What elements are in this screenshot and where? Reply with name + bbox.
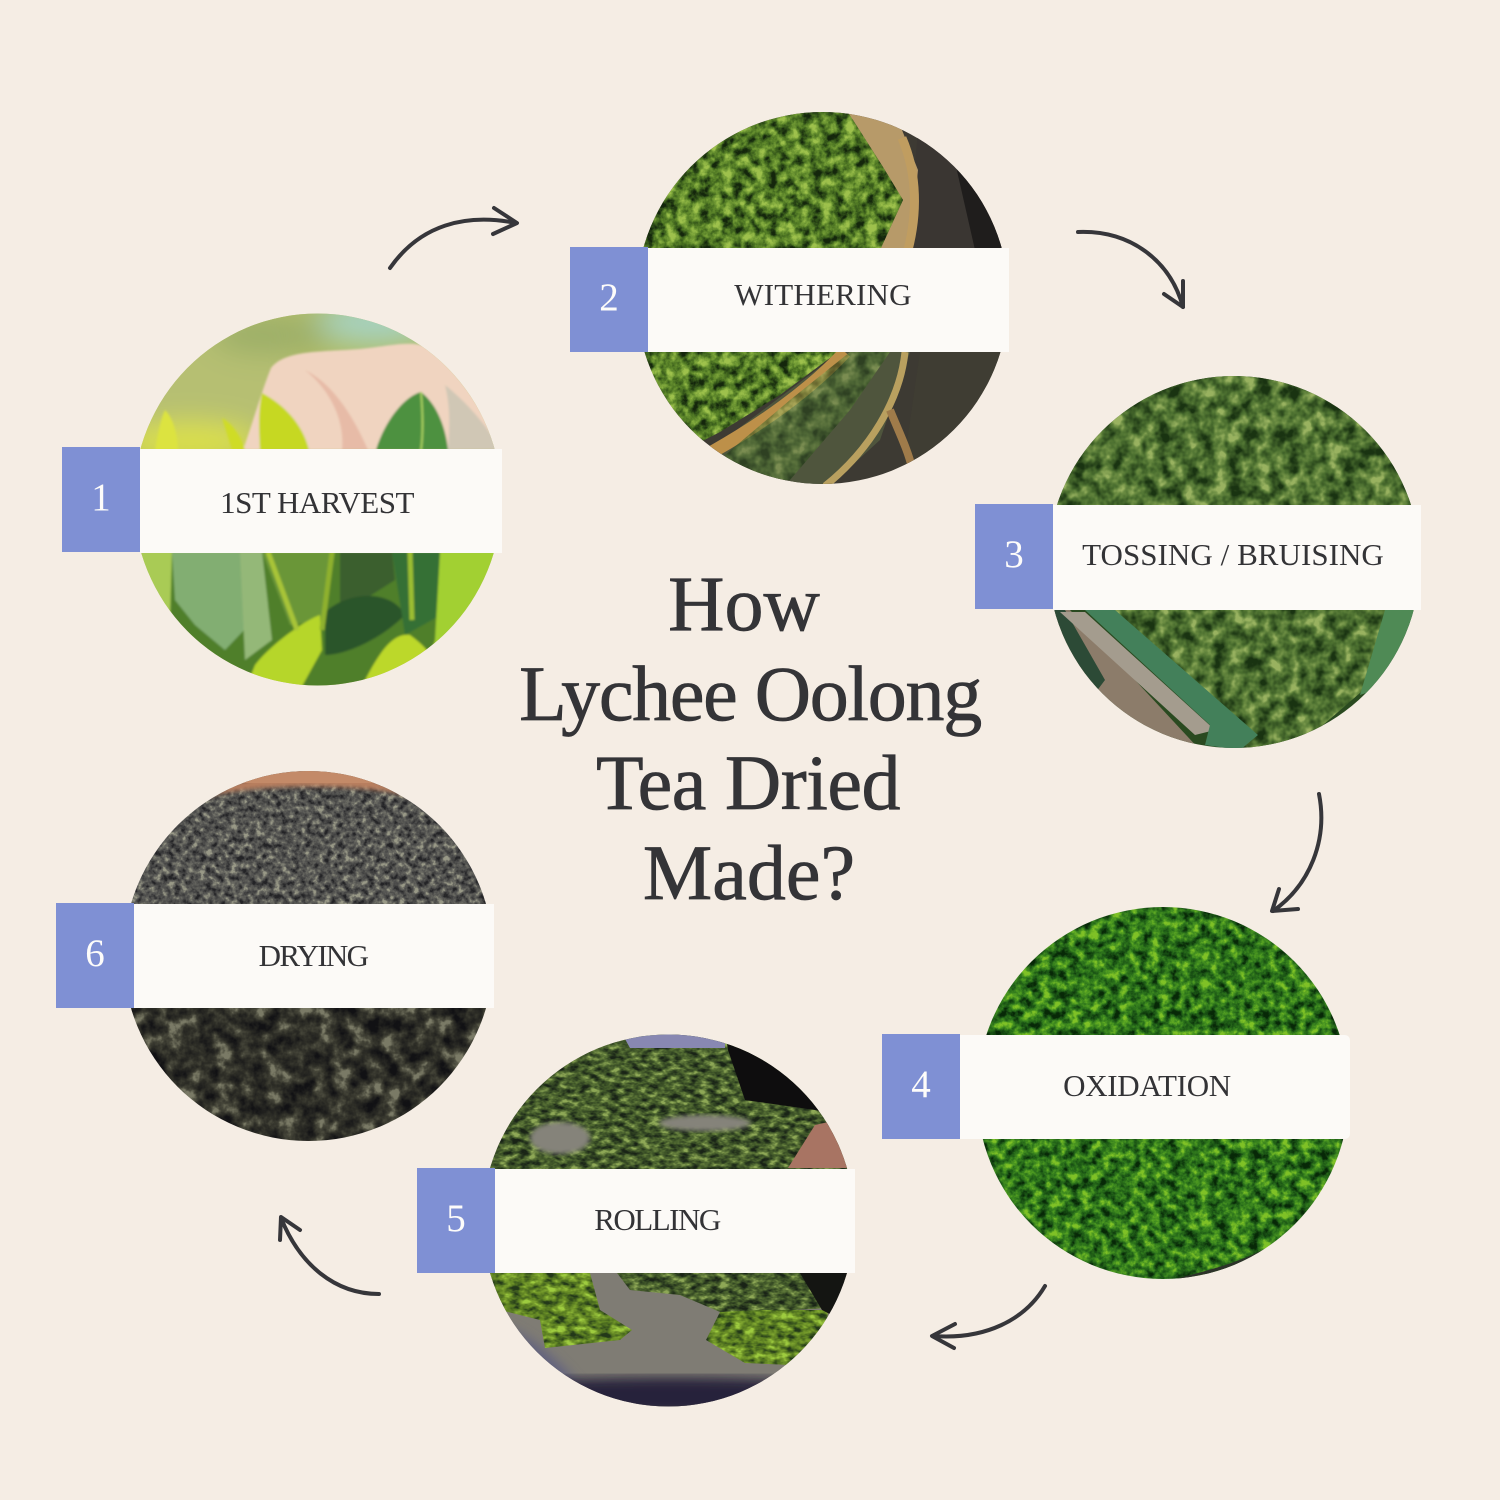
number badge 6: [56, 903, 134, 1008]
label: 1st harvest: 1ST HARVEST: [220, 485, 414, 520]
step 6: drying: [56, 765, 500, 1150]
arrow: step 3 to step 4: [1272, 794, 1321, 911]
number badge 5: [417, 1168, 495, 1273]
step 1: 1st harvest: [62, 300, 505, 692]
arrow: step 2 to step 3: [1078, 232, 1183, 307]
step 5: rolling: [417, 1030, 860, 1415]
title: Lychee Oolong: [519, 650, 981, 737]
label: drying: [134, 904, 494, 1008]
number badge 5: 5: [446, 1197, 466, 1240]
number badge 3: [975, 504, 1053, 609]
label: rolling: [495, 1169, 855, 1273]
label: tossing / bruising: [1053, 505, 1421, 610]
arrow: step 1 to step 2: [390, 208, 517, 268]
number badge 6: 6: [85, 932, 105, 975]
photo: bright green oxidising leaves: [975, 900, 1355, 1285]
photo: leaves on bamboo basket: [644, 112, 1002, 484]
title: Made?: [643, 829, 855, 916]
number badge 2: 2: [599, 276, 619, 319]
photo: rolled leaves on grey surface: [480, 1030, 860, 1415]
title: [519, 560, 981, 916]
number badge 4: [882, 1034, 960, 1139]
number badge 3: 3: [1004, 533, 1024, 576]
title: Tea Dried: [596, 739, 901, 826]
label: withering: WITHERING: [734, 277, 912, 312]
photo: hand picking tea leaves: [140, 314, 494, 686]
number badge 1: [62, 447, 140, 552]
label: drying: DRYING: [259, 938, 369, 973]
label: 1st harvest: [140, 449, 502, 553]
title: How: [668, 560, 820, 647]
number badge 4: 4: [911, 1063, 931, 1106]
step 3: tossing and bruising: [975, 370, 1430, 755]
photo: dried dark tea leaves: [131, 771, 486, 1141]
photo: leaves in tossing drum: [1054, 376, 1414, 748]
arrow: step 4 to step 5: [932, 1286, 1045, 1348]
step 2: withering: [570, 100, 1015, 490]
label: tossing / bruising: TOSSING / BRUISING: [1082, 537, 1384, 572]
label: rolling: ROLLING: [594, 1202, 721, 1237]
label: withering: [648, 248, 1009, 352]
number badge 2: [570, 247, 648, 352]
number badge 1: 1: [91, 476, 111, 519]
label: oxidation: OXIDATION: [1063, 1068, 1231, 1103]
step 4: oxidation: [882, 900, 1355, 1285]
arrow: step 5 to step 6: [280, 1217, 379, 1294]
label: oxidation: [960, 1035, 1350, 1139]
